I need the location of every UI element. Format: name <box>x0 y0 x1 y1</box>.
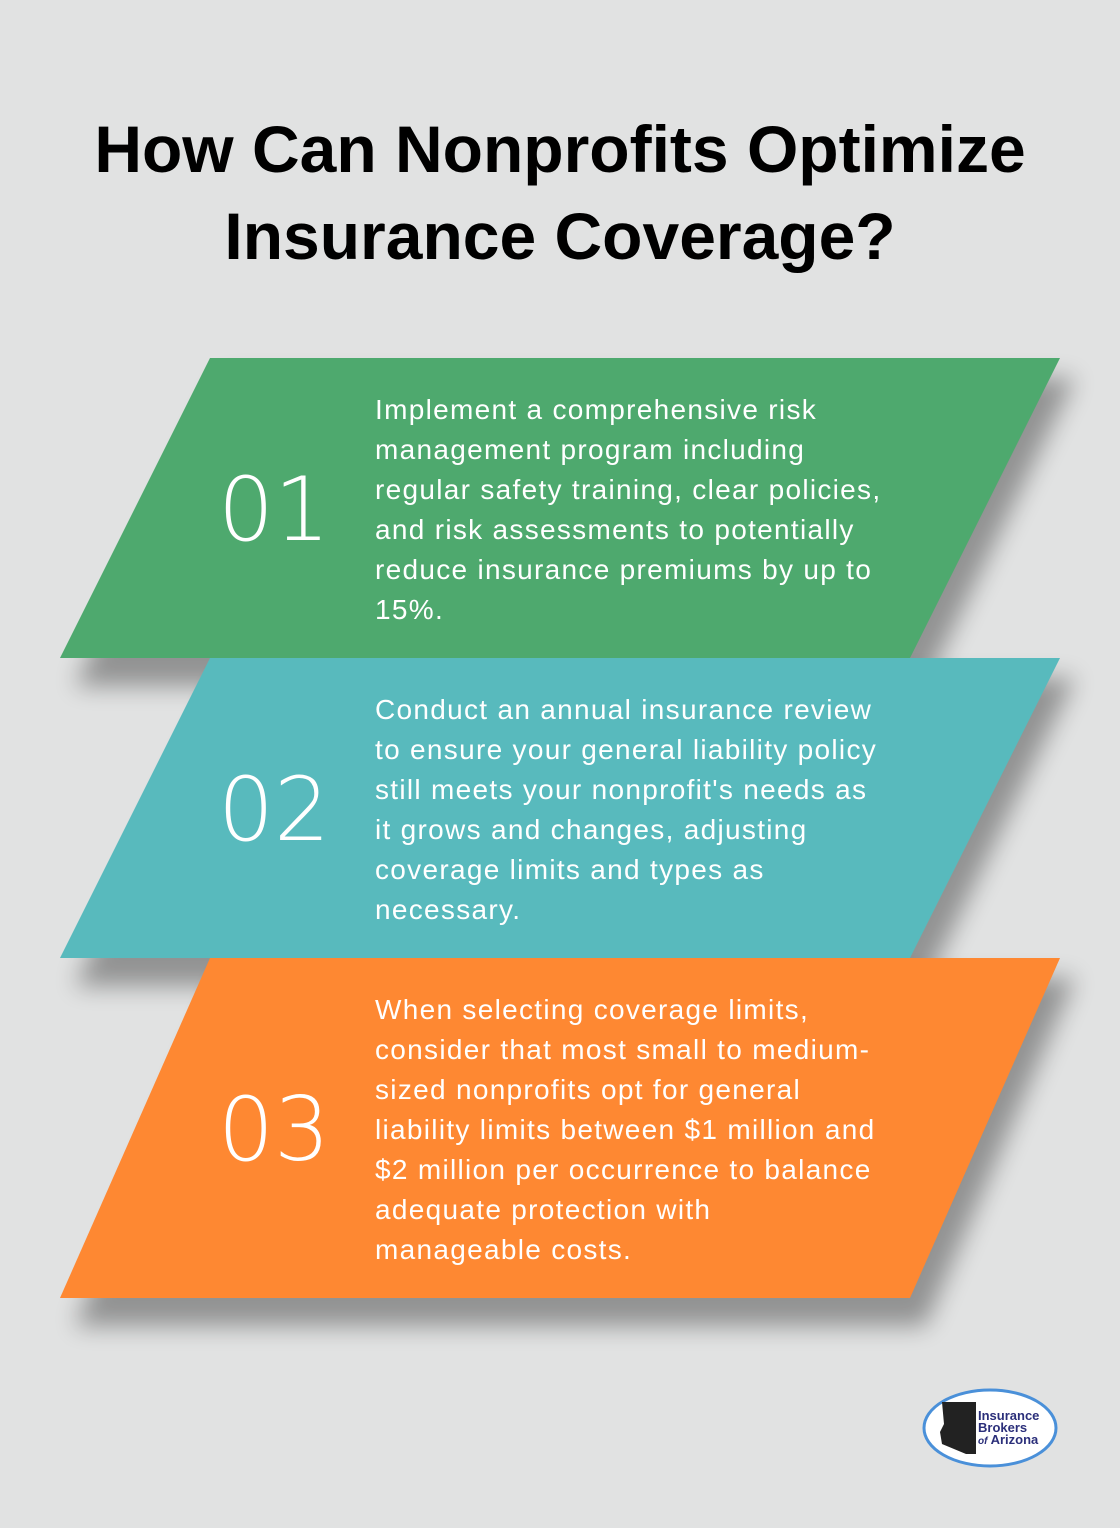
logo: Insurance <box>978 1408 1039 1423</box>
title <box>94 112 1026 273</box>
logo: Brokers <box>978 1420 1027 1435</box>
text 2: Conduct an annual insurance review <box>375 694 872 725</box>
logo <box>922 1388 1058 1468</box>
text 3: manageable costs. <box>375 1234 632 1265</box>
text 2: it grows and changes, adjusting <box>375 814 808 845</box>
text 1: and risk assessments to potentially <box>375 514 855 545</box>
text 1: regular safety training, clear policies, <box>375 474 881 505</box>
number 03: 03 <box>218 1078 330 1181</box>
band 2 <box>60 658 1060 958</box>
title: Insurance Coverage? <box>224 199 896 273</box>
text 3: consider that most small to medium- <box>375 1034 870 1065</box>
text 3 <box>375 994 875 1265</box>
band 3 <box>60 958 1060 1298</box>
number 01: 01 <box>218 458 330 561</box>
text 3: $2 million per occurrence to balance <box>375 1154 872 1185</box>
title: How Can Nonprofits Optimize <box>94 112 1026 186</box>
text 2 <box>375 694 877 925</box>
text 1: 15%. <box>375 594 444 625</box>
band 1 <box>60 358 1060 658</box>
text 1: reduce insurance premiums by up to <box>375 554 872 585</box>
text 3: adequate protection with <box>375 1194 711 1225</box>
text 2: necessary. <box>375 894 521 925</box>
text 1: management program including <box>375 434 805 465</box>
text 3: sized nonprofits opt for general <box>375 1074 801 1105</box>
text 3: When selecting coverage limits, <box>375 994 809 1025</box>
text 1: Implement a comprehensive risk <box>375 394 817 425</box>
text 2: coverage limits and types as <box>375 854 765 885</box>
text 1 <box>375 394 881 625</box>
number 02: 02 <box>218 758 330 861</box>
text 3: liability limits between $1 million and <box>375 1114 875 1145</box>
text 2: still meets your nonprofit's needs as <box>375 774 867 805</box>
text 2: to ensure your general liability policy <box>375 734 877 765</box>
logo: of Arizona <box>978 1432 1039 1447</box>
